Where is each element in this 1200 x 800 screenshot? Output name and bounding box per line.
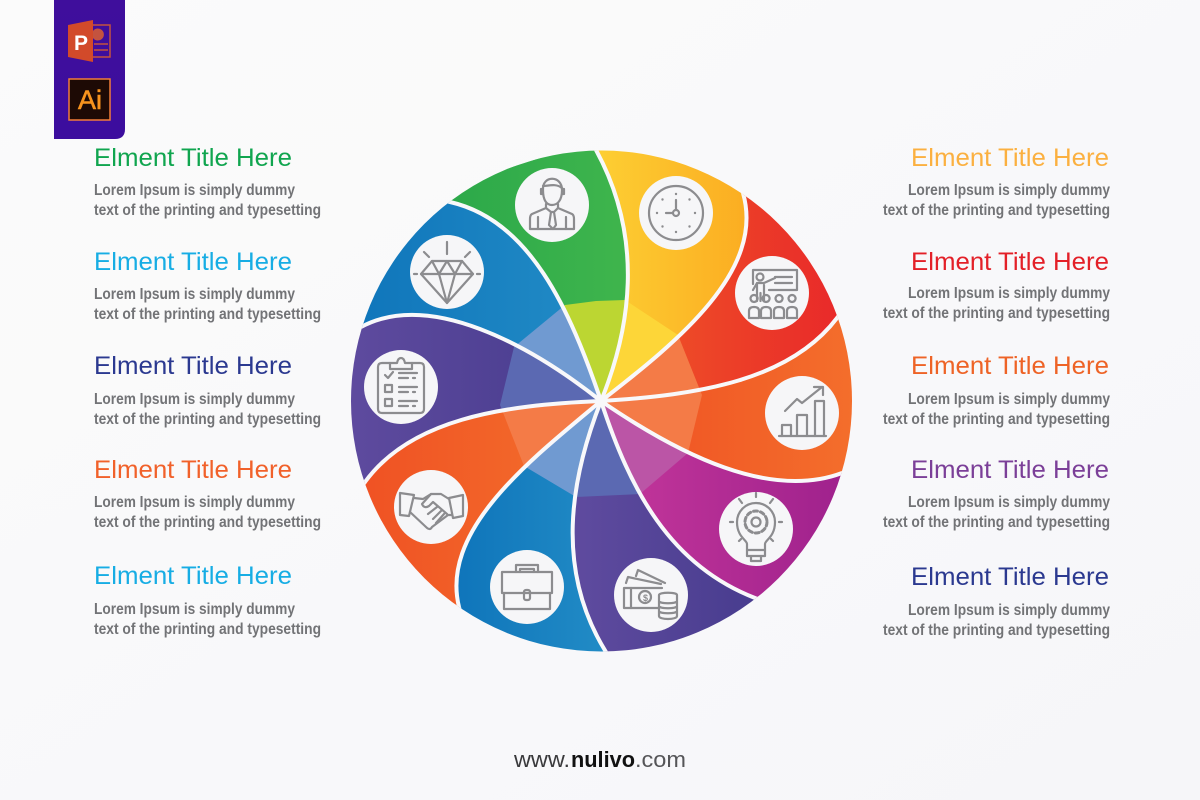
right item 4: Lorem Ipsum is simply dummy <box>908 494 1110 511</box>
blade: orange left <box>364 403 596 607</box>
left item 2: Lorem Ipsum is simply dummy <box>94 286 295 303</box>
footer url <box>513 747 686 772</box>
right item 3: Elment Title Here <box>911 352 1109 380</box>
left item 3: text of the printing and typesetting <box>94 411 321 428</box>
right item 3 <box>883 352 1110 428</box>
right item 5: Lorem Ipsum is simply dummy <box>908 602 1110 619</box>
left item 4: text of the printing and typesetting <box>94 514 321 531</box>
left item 1: text of the printing and typesetting <box>94 202 321 219</box>
pinwheel chart <box>351 150 852 652</box>
icon: growth chart <box>765 376 839 450</box>
left column text <box>94 144 321 638</box>
blade: blue top <box>362 202 597 396</box>
left item 2: Elment Title Here <box>94 248 292 276</box>
right item 2: Elment Title Here <box>911 248 1109 276</box>
blade: red <box>607 194 838 399</box>
blade: green <box>450 150 626 396</box>
footer url: www. <box>513 747 570 772</box>
blade: dark purple left <box>351 316 596 482</box>
icon: money <box>614 558 688 632</box>
right column text <box>883 144 1110 639</box>
right item 2: Lorem Ipsum is simply dummy <box>908 285 1110 302</box>
blade: dark purple bottom <box>574 407 756 652</box>
footer url: nulivo <box>571 747 635 772</box>
left item 5: text of the printing and typesetting <box>94 621 321 638</box>
right item 1: Elment Title Here <box>911 144 1109 172</box>
left item 1 <box>94 144 321 219</box>
icon: money: $ <box>643 593 648 603</box>
icon: clock <box>639 176 713 250</box>
right item 4: Elment Title Here <box>911 456 1109 484</box>
left item 3 <box>94 352 321 428</box>
icon: PowerPoint: P <box>74 32 88 55</box>
left item 5: Elment Title Here <box>94 562 292 590</box>
icon: Illustrator: Ai <box>78 85 102 115</box>
right item 5 <box>883 563 1110 639</box>
left item 1: Lorem Ipsum is simply dummy <box>94 182 295 199</box>
right item 5: text of the printing and typesetting <box>883 622 1110 639</box>
icon: training <box>735 256 809 330</box>
right item 3: Lorem Ipsum is simply dummy <box>908 391 1110 408</box>
right item 4: text of the printing and typesetting <box>883 514 1110 531</box>
icon: person <box>515 168 589 242</box>
icon: briefcase <box>490 550 564 624</box>
left item 4: Elment Title Here <box>94 456 292 484</box>
left item 4: Lorem Ipsum is simply dummy <box>94 494 295 511</box>
right item 2: text of the printing and typesetting <box>883 305 1110 322</box>
left item 3: Lorem Ipsum is simply dummy <box>94 391 295 408</box>
left item 5: Lorem Ipsum is simply dummy <box>94 601 295 618</box>
icon: diamond <box>410 235 484 309</box>
badge: software formats <box>54 0 125 139</box>
right item 1 <box>883 144 1110 219</box>
blade: magenta <box>604 406 842 598</box>
blade: orange <box>606 318 852 479</box>
right item 3: text of the printing and typesetting <box>883 411 1110 428</box>
right item 4 <box>883 456 1110 531</box>
right item 1: Lorem Ipsum is simply dummy <box>908 182 1110 199</box>
icon: lightbulb gear <box>719 492 793 566</box>
right item 1: text of the printing and typesetting <box>883 202 1110 219</box>
icon: clipboard <box>364 350 438 424</box>
blade: yellow <box>596 150 744 396</box>
footer url: .com <box>635 747 686 772</box>
left item 5 <box>94 562 321 638</box>
left item 2: text of the printing and typesetting <box>94 306 321 323</box>
left item 1: Elment Title Here <box>94 144 292 172</box>
icon: handshake <box>394 470 468 544</box>
right item 5: Elment Title Here <box>911 563 1109 591</box>
left item 2 <box>94 248 321 323</box>
blade: blue bottom <box>458 407 606 652</box>
right item 2 <box>883 248 1110 322</box>
left item 4 <box>94 456 321 531</box>
left item 3: Elment Title Here <box>94 352 292 380</box>
